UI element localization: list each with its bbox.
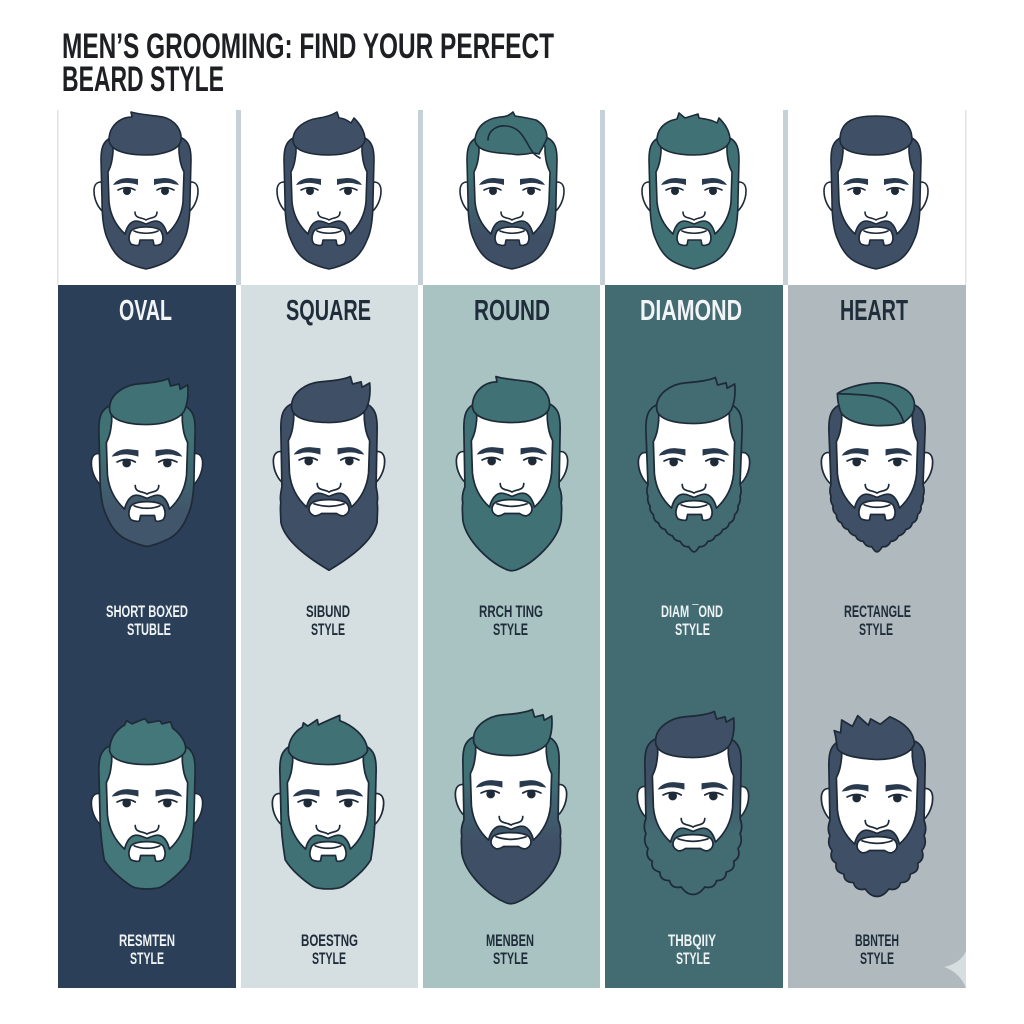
label: rectangle style: STYLE [859, 621, 893, 639]
label: short boxed stuble: SHORT BOXED [106, 603, 188, 621]
label: menben style: STYLE [493, 950, 528, 968]
icon: lower diamond face [637, 712, 749, 895]
heading: round: ROUND [474, 295, 550, 327]
label: boestng style: STYLE [312, 950, 346, 968]
label: bbnteh style [855, 932, 899, 968]
label: thbqiiy style [668, 932, 716, 968]
icon: short boxed stubble face [91, 379, 203, 547]
label: thbqiiy style: STYLE [676, 950, 710, 968]
icon: lower square face [272, 715, 384, 889]
icon: lower oval face [91, 719, 203, 889]
label: rectangle style [844, 603, 911, 639]
round panel background [423, 285, 600, 988]
icon: top heart face [824, 116, 928, 269]
corner fold [944, 951, 966, 988]
label: resmten style: RESMTEN [119, 932, 175, 950]
icon: lower heart face [821, 716, 933, 897]
panel: round column [423, 112, 600, 988]
panel: heart column [788, 116, 966, 988]
icon: round long beard face [456, 377, 568, 571]
label: sibund style [306, 603, 350, 639]
label: menben style: MENBEN [486, 932, 534, 950]
icon: swept hair scalloped beard face [821, 383, 933, 552]
panel: oval column [58, 112, 236, 988]
oval panel background [58, 285, 236, 988]
title: BEARD STYLE [62, 60, 224, 99]
label: menben style [486, 932, 534, 968]
icon: long pointed beard face [273, 377, 385, 570]
label: bbnteh style: BBNTEH [855, 932, 899, 950]
icon: top square face [277, 112, 381, 269]
heading: oval: OVAL [119, 295, 172, 327]
label: bbnteh style: STYLE [860, 950, 894, 968]
panel: square column [241, 112, 418, 988]
icon: top round face [460, 112, 564, 269]
heading: heart: HEART [840, 295, 908, 327]
square panel background [241, 285, 418, 988]
icon: lower round face [455, 710, 567, 904]
heading: square: SQUARE [286, 295, 371, 327]
diamond panel background [605, 285, 783, 988]
panel: diamond column [605, 113, 783, 988]
heading: diamond: DIAMOND [640, 295, 742, 327]
label: resmten style: STYLE [130, 950, 164, 968]
icon: top oval face [94, 112, 198, 269]
label: rrch ting style: STYLE [493, 621, 528, 639]
label: sibund style: STYLE [311, 621, 345, 639]
label: diam ond style: DIAM ¯OND [661, 603, 723, 621]
label: thbqiiy style: THBQIIY [668, 932, 716, 950]
icon: top diamond face [642, 113, 746, 269]
face shape header row dividers [57, 110, 966, 285]
label: resmten style [119, 932, 175, 968]
label: short boxed stuble [106, 603, 188, 639]
label: rrch ting style: RRCH TING [479, 603, 543, 621]
label: boestng style: BOESTNG [301, 932, 358, 950]
label: boestng style [301, 932, 358, 968]
label: rrch ting style [479, 603, 543, 639]
label: short boxed stuble: STUBLE [127, 621, 171, 639]
title [62, 27, 554, 99]
label: diam ond style: STYLE [675, 621, 710, 639]
label: diam ond style [661, 603, 723, 639]
heart panel background [788, 285, 966, 988]
title: MEN’S GROOMING: FIND YOUR PERFECT [62, 27, 554, 66]
label: sibund style: SIBUND [306, 603, 350, 621]
icon: scalloped beard face [638, 378, 750, 552]
label: rectangle style: RECTANGLE [844, 603, 911, 621]
